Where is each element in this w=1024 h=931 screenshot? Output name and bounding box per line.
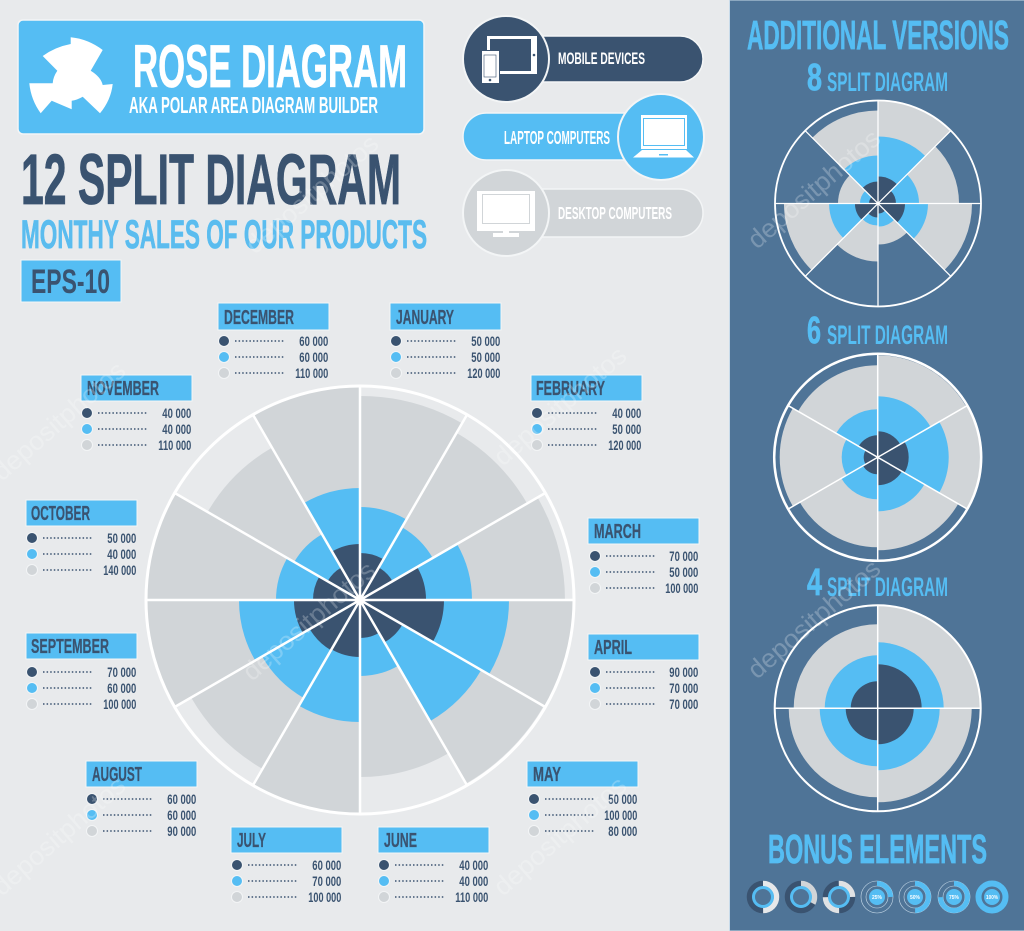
wedge: november — [208, 436, 404, 600]
wedge: february — [360, 433, 540, 648]
card: may: 100 000 — [604, 808, 637, 823]
wedge: may — [307, 600, 544, 798]
card: october: 40 000 — [107, 547, 136, 562]
card: march: 70 000 — [669, 549, 698, 564]
card: october: 50 000 — [107, 531, 136, 546]
card: november: 40 000 — [162, 422, 191, 437]
progress: 25%: 25% — [872, 895, 882, 901]
heading: 12 split diagram: 12 SPLIT DIAGRAM — [21, 141, 401, 220]
legend: laptop computers: LAPTOP COMPUTERS — [504, 127, 610, 148]
chart: 4 split rose diagram — [775, 605, 981, 811]
watermark: stock photo text: depositphotos — [487, 770, 632, 902]
progress: 75% — [938, 881, 970, 913]
card: january: 50 000 — [471, 350, 500, 365]
card: february: FEBRUARY — [536, 378, 605, 400]
card: december — [218, 303, 329, 381]
card: november — [81, 375, 192, 453]
card: january: 50 000 — [471, 334, 500, 349]
card: september: 70 000 — [107, 665, 136, 680]
card: april: 70 000 — [669, 697, 698, 712]
watermark: stock photo text: depositphotos — [741, 553, 886, 685]
donut: quarter split — [826, 884, 852, 910]
bonus: donut icons — [750, 881, 1006, 913]
legend: mobile devices: MOBILE DEVICES — [558, 49, 645, 68]
wedge: august — [178, 551, 360, 769]
card: march — [588, 518, 699, 596]
card: january: 120 000 — [467, 366, 500, 381]
card: august: 60 000 — [167, 792, 196, 807]
wedge: october — [147, 494, 360, 600]
heading: 6 split diagram: 6 — [807, 310, 821, 352]
card: january — [390, 303, 501, 381]
chart: 8 split rose diagram — [765, 91, 981, 306]
card: september: 60 000 — [107, 681, 136, 696]
card: april: APRIL — [594, 637, 632, 659]
card: august: 90 000 — [167, 824, 196, 839]
icon: desktop monitor — [477, 191, 535, 237]
wedge: december — [253, 361, 453, 600]
card: july: JULY — [237, 830, 266, 852]
card: december: DECEMBER — [224, 307, 294, 329]
badge: EPS-10: EPS-10 — [31, 263, 110, 301]
card: march: 100 000 — [665, 581, 698, 596]
card: july: 100 000 — [308, 890, 341, 905]
watermark: stock photo text — [0, 123, 886, 902]
card: september: SEPTEMBER — [31, 636, 109, 658]
legend: desktop computers: DESKTOP COMPUTERS — [558, 203, 672, 223]
watermark: stock photo text: depositphotos — [741, 123, 886, 255]
icon: tablet and phone — [481, 36, 537, 84]
legend: mobile devices — [463, 16, 703, 102]
legend: desktop computers — [463, 170, 703, 256]
card: october: OCTOBER — [31, 503, 90, 525]
wedge: april — [360, 600, 575, 708]
heading: 8 split diagram: 8 — [807, 57, 822, 99]
header banner: rose diagram — [18, 20, 424, 134]
heading: 4 split diagram — [807, 562, 948, 604]
panel: additional versions sidebar — [730, 0, 1024, 931]
heading: 6 split diagram — [807, 310, 948, 352]
watermark: stock photo text: depositphotos — [487, 340, 632, 472]
banner title: ROSE DIAGRAM — [133, 33, 407, 100]
card: april — [588, 634, 699, 712]
card: october — [26, 500, 137, 578]
progress: 50% — [899, 881, 931, 913]
watermark: stock photo text: depositphotos — [239, 128, 384, 260]
card: april: 70 000 — [669, 681, 698, 696]
wedge: january — [360, 396, 462, 600]
banner subtitle: AKA POLAR AREA DIAGRAM BUILDER — [129, 92, 378, 118]
card: july: 60 000 — [312, 858, 341, 873]
chart: 12 split rose diagram — [122, 361, 589, 815]
card: june: 40 000 — [459, 874, 488, 889]
card: june — [378, 827, 489, 905]
card: june: 40 000 — [459, 858, 488, 873]
icon: rose logo — [29, 37, 113, 113]
card: december: 60 000 — [299, 334, 328, 349]
heading: 8 split diagram — [807, 57, 948, 99]
card: may: 50 000 — [608, 792, 637, 807]
card: february: 50 000 — [612, 422, 641, 437]
card: february: 120 000 — [608, 438, 641, 453]
card: may: MAY — [533, 764, 561, 786]
card: april: 90 000 — [669, 665, 698, 680]
card: october: 140 000 — [103, 563, 136, 578]
card: february — [531, 375, 642, 453]
subheading: monthly sales: MONTHY SALES OF OUR PRODUCTS — [21, 213, 427, 257]
card: february: 40 000 — [612, 406, 641, 421]
progress: 100%: 100% — [986, 895, 998, 901]
card: may — [527, 761, 638, 839]
card: august: 60 000 — [167, 808, 196, 823]
card: november: 40 000 — [162, 406, 191, 421]
card: june: JUNE — [384, 830, 417, 852]
card: july — [231, 827, 342, 905]
card: november: 110 000 — [158, 438, 191, 453]
progress: 25% — [861, 881, 893, 913]
card: december: 110 000 — [295, 366, 328, 381]
card: january: JANUARY — [396, 307, 454, 329]
wedge: march — [360, 498, 589, 689]
progress: 50%: 50% — [910, 895, 920, 901]
donut: third split — [788, 884, 814, 910]
card: august — [86, 761, 197, 839]
badge: EPS-10 — [21, 260, 121, 302]
card: july: 70 000 — [312, 874, 341, 889]
wedge: september — [122, 508, 360, 706]
watermark: stock photo text: depositphotos — [236, 555, 381, 687]
card: september: 100 000 — [103, 697, 136, 712]
card: may: 80 000 — [608, 824, 637, 839]
card: june: 110 000 — [455, 890, 488, 905]
chart: 6 split rose diagram — [750, 342, 1013, 574]
card: march: 50 000 — [669, 565, 698, 580]
wedge: june — [283, 600, 448, 798]
icon: laptop — [633, 115, 694, 158]
card: december: 60 000 — [299, 350, 328, 365]
progress: 75%: 75% — [949, 895, 959, 901]
card: november: NOVEMBER — [87, 378, 159, 400]
legend: laptop computers — [463, 94, 704, 180]
wedge: july — [252, 600, 360, 815]
progress: 100% — [978, 884, 1006, 910]
donut: half split — [750, 884, 776, 910]
heading: 4 split diagram: 4 — [807, 562, 822, 604]
card: march: MARCH — [594, 521, 641, 543]
card: august: AUGUST — [92, 764, 142, 786]
card: september — [26, 633, 137, 712]
